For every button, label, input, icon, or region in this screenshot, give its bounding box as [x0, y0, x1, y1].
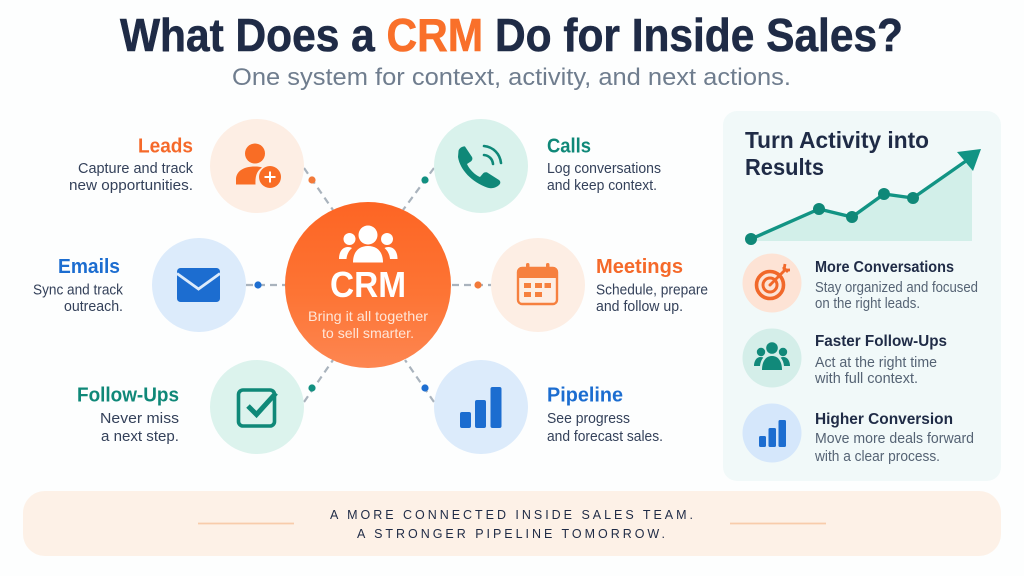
infographic canvas: Log conversations — [547, 161, 661, 177]
Emails text: Emails — [58, 256, 120, 278]
CRM tagline: Bring it all together — [308, 308, 428, 324]
benefit: higher conversion — [742, 404, 953, 462]
Calls text: Calls — [547, 136, 591, 158]
infographic canvas: outreach. — [64, 299, 123, 315]
panel: results: Move more deals forward — [815, 431, 974, 447]
Follow-Ups text: Follow-Ups — [77, 384, 179, 406]
faster follow-ups text: Faster Follow-Ups — [815, 333, 947, 350]
infographic canvas: Sync and track — [33, 282, 124, 298]
icon: checkbox — [238, 390, 276, 426]
higher conversion text: Higher Conversion — [815, 411, 953, 428]
hub connectors — [246, 168, 491, 402]
item: Pipeline — [434, 360, 623, 454]
bottom banner — [23, 491, 1001, 556]
icon: small bars — [759, 420, 786, 447]
infographic canvas: Schedule, prepare — [596, 282, 708, 298]
infographic canvas: and follow up. — [596, 299, 683, 315]
icon: CRM people — [339, 226, 398, 262]
item: Follow-Ups — [77, 360, 304, 454]
panel: results — [723, 111, 1001, 481]
icon: calendar — [517, 263, 558, 304]
subtitle: One system for context, activity, and next actions. — [232, 64, 791, 91]
Leads text: Leads — [138, 136, 193, 158]
banner line one: A MORE CONNECTED INSIDE SALES TEAM. — [330, 508, 693, 522]
panel: results: on the right leads. — [815, 296, 920, 312]
benefit: more conversations — [742, 254, 954, 312]
item: Calls — [434, 119, 591, 213]
benefit: faster follow-ups — [742, 328, 947, 388]
more conversations text: More Conversations — [815, 259, 954, 276]
item: Leads — [138, 119, 304, 213]
panel: results: Act at the right time — [815, 355, 937, 371]
infographic canvas: Capture and track — [78, 161, 194, 177]
Meetings text: Meetings — [596, 256, 683, 278]
infographic canvas: a next step. — [101, 429, 179, 445]
icon: bar chart — [460, 387, 502, 428]
panel: results: Stay organized and focused — [815, 280, 978, 296]
banner line two: A STRONGER PIPELINE TOMORROW. — [357, 527, 665, 541]
icon: team — [754, 342, 790, 370]
panel: results: with full context. — [814, 371, 918, 387]
growth chart — [745, 149, 981, 245]
Pipeline text: Pipeline — [547, 384, 623, 406]
infographic canvas: See progress — [547, 411, 630, 427]
item: Emails — [58, 238, 246, 332]
panel heading: Turn Activity into — [745, 127, 929, 153]
infographic canvas: to sell smarter. — [322, 325, 414, 341]
panel heading second line: Results — [745, 154, 824, 180]
infographic canvas: Never miss — [100, 411, 179, 427]
title: What Does a CRM Do for Inside Sales? — [120, 9, 903, 61]
infographic canvas: new opportunities. — [69, 178, 193, 194]
panel: results: with a clear process. — [814, 449, 940, 465]
CRM label: CRM — [330, 264, 406, 305]
central CRM hub — [285, 202, 451, 368]
icon: phone — [458, 146, 501, 188]
infographic canvas: and forecast sales. — [547, 429, 663, 445]
icon: add lead — [236, 144, 281, 188]
infographic canvas: and keep context. — [547, 178, 657, 194]
icon: target — [756, 264, 790, 298]
icon: envelope — [177, 268, 220, 302]
item: Meetings — [491, 238, 683, 332]
